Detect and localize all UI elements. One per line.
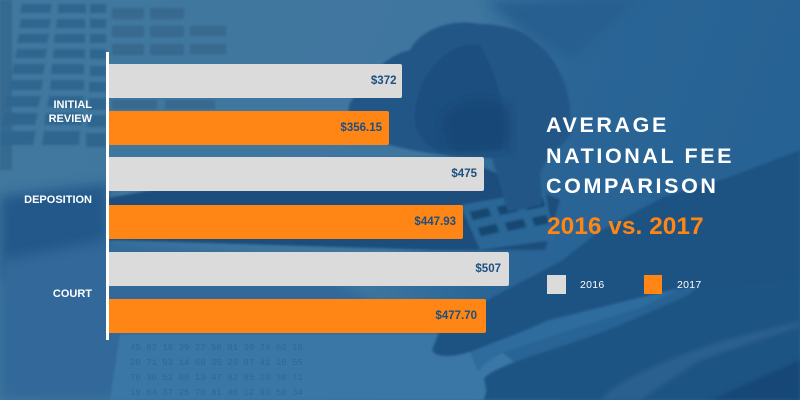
bar: initial review 2017 [109,111,389,145]
bar: deposition 2016: $475 [451,168,477,180]
background photo: hands on calculator: 19 64 37 25 70 81 46 12 93 58 34 [130,388,303,398]
laptop keys [0,0,226,170]
axis line [106,52,109,340]
laptop edge and lower left [0,184,108,290]
background photo: hands on calculator: 76 30 52 88 13 47 62 95 20 38 71 [130,373,303,383]
paper with numbers [110,334,560,400]
category label: deposition: DEPOSITION [24,194,92,206]
bar: initial review 2017: $356.15 [340,122,382,134]
title line 3: COMPARISON [546,174,719,198]
calculator body [108,158,560,250]
bar: initial review 2016 [109,64,402,98]
bar: deposition 2017: $447.93 [414,216,456,228]
legend swatch 2016 [547,275,566,294]
bar: initial review 2016: $372 [371,75,396,87]
bar: court 2017 [109,299,486,333]
legend label 2017: 2017 [677,279,702,291]
bar: court 2016 [109,252,509,286]
legend label 2016: 2016 [580,279,605,291]
category label: court: COURT [53,288,92,300]
bar: deposition 2017 [109,205,463,239]
legend [547,275,702,294]
subtitle: 2016 vs. 2017 [547,213,704,240]
bar chart [24,52,509,340]
background photo: hands on calculator: 28 71 93 14 60 35 29 87 41 16 55 [130,358,303,368]
background photo: hands on calculator: 45 62 18 39 27 56 81 30 74 62 19 [130,343,303,353]
category label: initial review: INITIAL [54,99,92,111]
category label: initial review: REVIEW [49,113,92,125]
bar: deposition 2016 [109,157,484,191]
title line 2: NATIONAL FEE [546,144,734,168]
legend swatch 2017 [644,275,662,294]
title: AVERAGE [546,113,669,137]
bar: court 2017: $477.70 [435,310,477,322]
lower hands [432,150,800,400]
category label: initial review [49,99,92,125]
bar: court 2016: $507 [475,263,501,275]
upper hand [349,0,640,212]
